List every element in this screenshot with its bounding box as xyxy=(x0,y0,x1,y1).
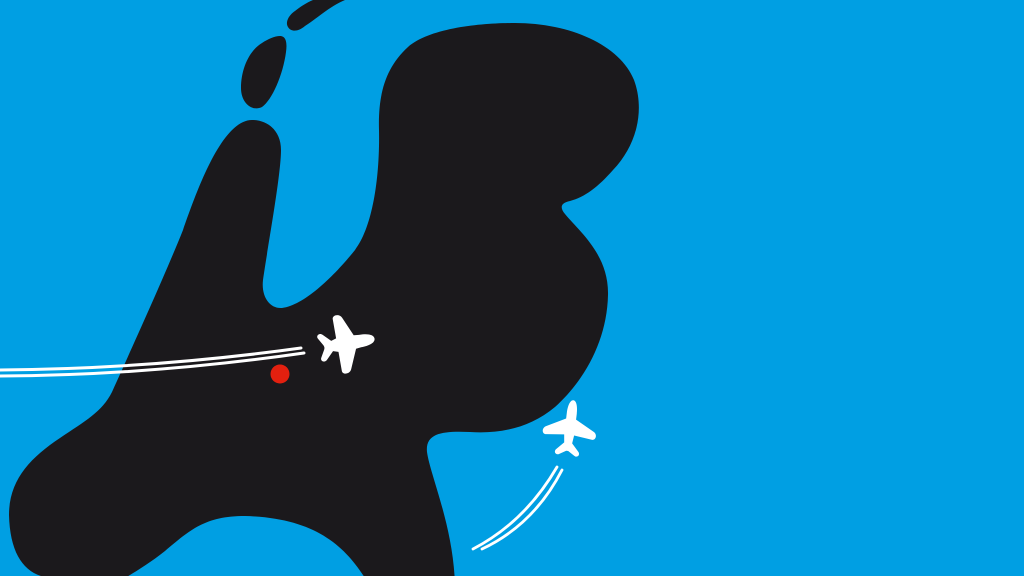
icon: plane heading north xyxy=(540,397,600,459)
marker: red dot xyxy=(270,364,290,384)
map: northern island xyxy=(241,36,286,108)
map: northeastern island xyxy=(287,0,345,31)
map: mainland silhouette xyxy=(9,23,639,576)
contrail: left plane xyxy=(0,348,304,376)
icon: plane heading east xyxy=(314,309,380,377)
contrail: right plane xyxy=(473,467,562,549)
